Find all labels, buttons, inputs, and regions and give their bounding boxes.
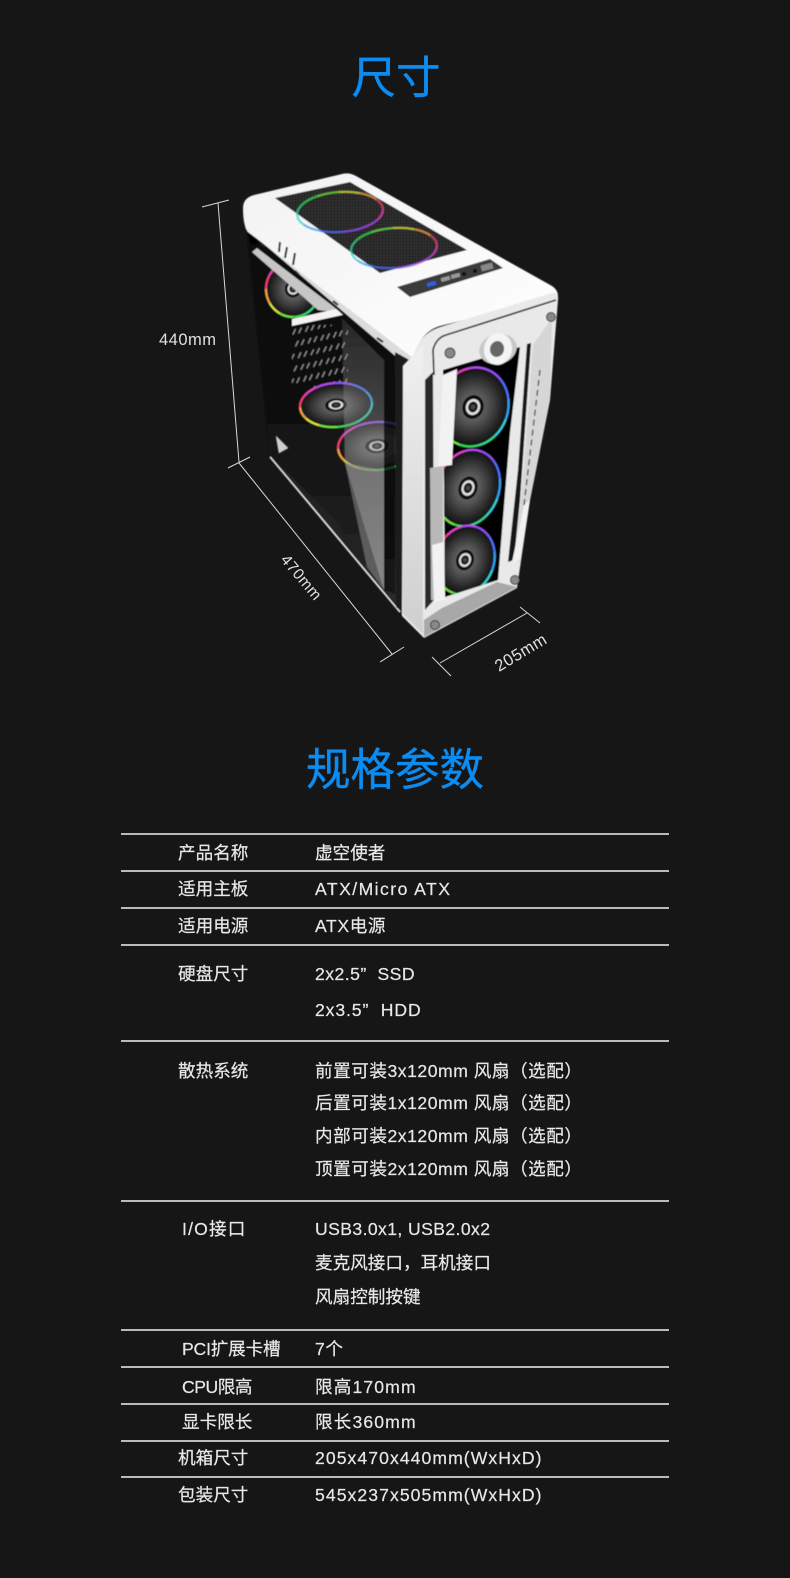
row: CPU限高: [182, 1377, 416, 1397]
row: 产品名称: 产品名称: [178, 843, 248, 863]
title: 规格参数: 规格参数: [306, 733, 484, 798]
row: PCI扩展卡槽: [182, 1339, 343, 1359]
row: 适用电源: 适用电源: [178, 916, 248, 936]
top mesh with fan rings: [275, 181, 467, 279]
screws: [430, 312, 556, 630]
dimension: 470mm depth: [239, 463, 404, 662]
row: 散热系统: 后置可装1x120mm 风扇（选配）: [315, 1093, 582, 1113]
row: 适用主板: 适用主板: [178, 879, 248, 899]
row: 适用电源: [178, 916, 386, 936]
top I/O panel: [397, 259, 503, 297]
row: 硬盘尺寸: [178, 964, 421, 1020]
top trim under the roof: [245, 222, 413, 368]
row: CPU限高: 限高170mm: [315, 1377, 416, 1397]
row: 散热系统: 前置可装3x120mm 风扇（选配）: [315, 1061, 582, 1081]
row: 散热系统: [178, 1061, 582, 1179]
row: 散热系统: 顶置可装2x120mm 风扇（选配）: [315, 1159, 582, 1179]
row: 硬盘尺寸: 硬盘尺寸: [178, 964, 248, 984]
row: 机箱尺寸: 机箱尺寸: [178, 1448, 248, 1468]
row: 适用电源: ATX电源: [315, 916, 386, 936]
dark side of front corner: [395, 352, 413, 612]
product photo: PC case: [243, 173, 558, 638]
row: 产品名称: [178, 843, 385, 863]
dimension: 470mm depth: 470mm: [277, 552, 325, 604]
row: 散热系统: 内部可装2x120mm 风扇（选配）: [315, 1126, 582, 1146]
slots on top edge: [260, 242, 383, 342]
front left white brackets: [430, 369, 457, 602]
front left white strip shading: [403, 345, 423, 634]
row: 硬盘尺寸: 2x3.5” HDD: [315, 1000, 421, 1020]
row: I/O接口: I/O接口: [182, 1219, 245, 1239]
white bottom edge of glass: [270, 457, 400, 612]
row: 机箱尺寸: [178, 1448, 542, 1468]
row: PCI扩展卡槽: PCI扩展卡槽: [182, 1339, 281, 1359]
row: 包装尺寸: 545x237x505mm(WxHxD): [315, 1485, 542, 1505]
front grille interior with fans: [442, 346, 520, 598]
dark slot beside strip: [425, 372, 434, 610]
row: I/O接口: USB3.0x1, USB2.0x2: [315, 1219, 490, 1239]
row: 显卡限长: [182, 1412, 416, 1432]
front power button: [476, 330, 520, 368]
row: 产品名称: 虚空使者: [315, 843, 385, 863]
row: 显卡限长: 限长360mm: [315, 1412, 416, 1432]
case side glass panel: [246, 228, 423, 632]
title: 尺寸: 尺寸: [351, 41, 441, 106]
row: PCI扩展卡槽: 7个: [315, 1339, 343, 1359]
row: I/O接口: [182, 1219, 491, 1307]
dark line around front panel: [433, 300, 556, 375]
row: 包装尺寸: [178, 1485, 542, 1505]
front white frame: [402, 293, 558, 638]
row: 包装尺寸: 包装尺寸: [178, 1485, 248, 1505]
row: 适用主板: [178, 879, 450, 899]
row: 适用主板: ATX/Micro ATX: [315, 879, 450, 899]
dimension: 440mm height: 440mm: [159, 331, 217, 349]
row: I/O接口: 麦克风接口，耳机接口: [315, 1253, 491, 1273]
specification table: [121, 834, 669, 1505]
white top face: [243, 173, 558, 358]
front bottom panel: [424, 582, 517, 637]
row: 散热系统: 散热系统: [178, 1061, 248, 1081]
row: CPU限高: CPU限高: [182, 1377, 252, 1397]
interior side fans and vents: [251, 247, 396, 594]
row: I/O接口: 风扇控制按键: [315, 1287, 421, 1307]
row: 机箱尺寸: 205x470x440mm(WxHxD): [315, 1448, 542, 1468]
front right frame brackets: [508, 318, 552, 562]
dimension: 440mm height: [159, 200, 250, 468]
row: 硬盘尺寸: 2x2.5” SSD: [315, 964, 415, 984]
dimension: 205mm width: [432, 607, 550, 676]
dimension: 205mm width: 205mm: [492, 630, 550, 675]
row: 显卡限长: 显卡限长: [182, 1412, 252, 1432]
table rules: [121, 834, 669, 1477]
